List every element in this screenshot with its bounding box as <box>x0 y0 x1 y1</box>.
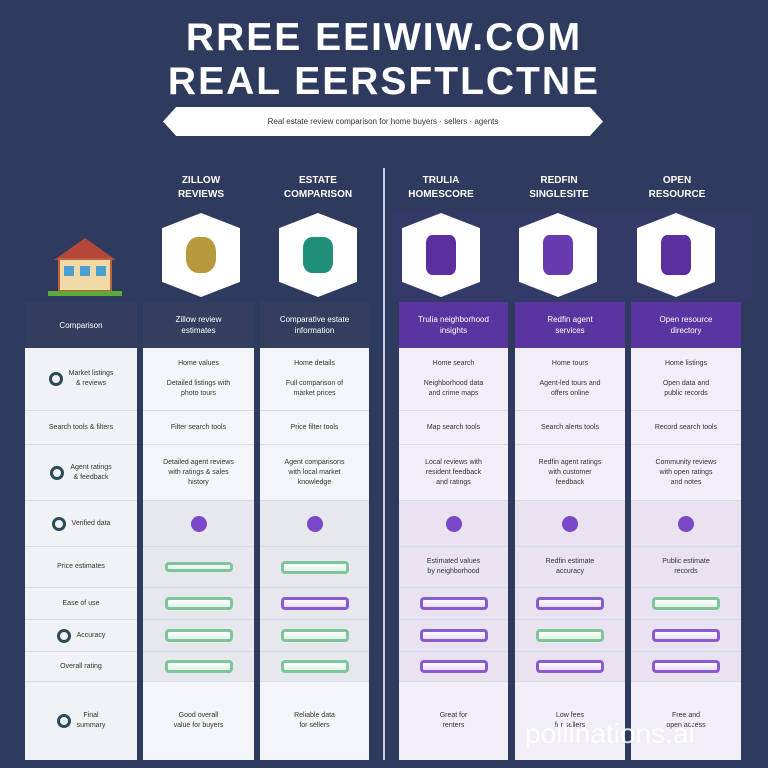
panel: column 5: Open resource <box>660 315 712 324</box>
panel: column 2: for sellers <box>299 722 330 729</box>
panel: column 2: Home details <box>294 360 335 367</box>
panel: label column: Ease of use <box>63 600 99 606</box>
subtitle banner <box>163 107 603 136</box>
panel: column 3: Map search tools <box>427 424 480 430</box>
panel: column 2: Reliable data <box>294 712 335 719</box>
panel: column 1: with ratings & sales <box>168 468 229 476</box>
panel: column 2: market prices <box>293 390 336 397</box>
panel: column 4: with customer <box>548 468 592 476</box>
panel: label column <box>25 320 137 760</box>
panel: column 5: Free and <box>672 712 700 719</box>
panel: column 2: knowledge <box>298 478 331 486</box>
text: REDFIN <box>540 175 578 186</box>
text: OPEN <box>663 175 691 186</box>
panel: label column: Price estimates <box>57 563 105 570</box>
purple tint area <box>392 210 752 302</box>
panel: label column: Verified data <box>72 520 110 526</box>
panel: column 1: value for buyers <box>174 722 223 729</box>
panel: column 5: Community reviews <box>655 458 717 466</box>
panel: column 1 <box>143 315 254 760</box>
panel: column 4: for sellers <box>555 722 585 729</box>
panel: column 5: public records <box>664 390 708 397</box>
panel: column 1: Detailed agent reviews <box>163 458 234 466</box>
panel: column 4: Redfin agent ratings <box>539 458 601 466</box>
title line 1: RREE EEIWIW.COM <box>186 16 582 59</box>
icon: house <box>48 238 122 296</box>
text: RESOURCE <box>649 189 705 200</box>
panel: column 1: Home values <box>178 360 219 367</box>
panel: column 3: Estimated values <box>427 558 480 565</box>
panel: label column: Agent ratings <box>70 464 112 470</box>
panel: column 4 <box>515 302 625 760</box>
divider <box>383 168 385 760</box>
panel: label column: summary <box>77 722 105 729</box>
panel: column 3: and ratings <box>436 478 471 486</box>
panel: column 3: Local reviews with <box>425 458 482 466</box>
panel: column 2: information <box>295 326 334 335</box>
panel: column 1: estimates <box>181 326 216 335</box>
panel: column 5: Record search tools <box>655 424 717 430</box>
panel: column 2: Agent comparisons <box>285 458 344 466</box>
panel: column 2: Full comparison of <box>286 380 343 387</box>
panel: column 3: by neighborhood <box>427 568 480 575</box>
panel: label column: Comparison <box>59 320 103 330</box>
panel: column 4: Agent-led tours and <box>539 380 601 387</box>
panel: column 3: resident feedback <box>426 468 481 476</box>
panel: column 1: Good overall <box>179 712 218 719</box>
panel: column 4: accuracy <box>556 568 584 575</box>
icons: hexagons <box>162 213 240 297</box>
watermark: pollinations.ai <box>525 718 695 749</box>
subtitle banner: Real estate review comparison for home buyers · sellers · agents <box>268 117 498 126</box>
panel: column 4: Search alerts tools <box>541 424 599 430</box>
column headings <box>178 175 224 200</box>
panel: column 3: Great for <box>440 712 467 719</box>
panel: label column: Accuracy <box>77 632 105 638</box>
panel: column 5: directory <box>671 326 701 335</box>
panel: column 2: with local market <box>288 468 341 476</box>
panel: column 1: Detailed listings with <box>167 380 230 387</box>
panel: column 4: Redfin agent <box>547 315 593 324</box>
title line 2: REAL EERSFTLCTNE <box>168 60 600 103</box>
panel: column 3: Trulia neighborhood <box>418 315 489 324</box>
panel: column 4: offers online <box>551 390 589 397</box>
panel: column 1: photo tours <box>181 390 216 397</box>
panel: label column: Search tools & filters <box>49 424 113 430</box>
panel: column 4: feedback <box>556 478 584 486</box>
panel: label column: & reviews <box>76 380 106 387</box>
panel: label column: Market listings <box>69 370 113 377</box>
panel: label column: Overall rating <box>60 662 102 670</box>
panel: column 5: with open ratings <box>660 468 712 476</box>
panel: column 4: Home tours <box>552 360 588 367</box>
panel: column 3 <box>399 302 508 760</box>
panel: label column: Final <box>83 712 99 719</box>
panel: column 3: and crime maps <box>429 390 478 397</box>
text: ESTATE <box>299 175 337 186</box>
panel: column 5: Open data and <box>663 380 709 387</box>
panel: label column: & feedback <box>73 474 109 480</box>
panel: column 4: Low fees <box>556 712 584 719</box>
panel: column 4: services <box>555 326 585 335</box>
panel: column 5: Public estimate <box>662 558 710 565</box>
panel: column 1: Filter search tools <box>171 424 226 430</box>
panel: column 2 <box>260 315 369 760</box>
panel: column 3: renters <box>443 722 464 729</box>
panel: column 3: insights <box>440 326 467 335</box>
text: HOMESCORE <box>408 189 474 200</box>
panel: column 1: history <box>188 478 209 486</box>
column headings: REVIEWS <box>178 189 224 200</box>
panel: column 5: and notes <box>671 478 701 486</box>
panel: column 5: records <box>674 568 698 575</box>
column headings: ZILLOW <box>182 175 220 186</box>
panel: column 2: Price filter tools <box>291 424 338 430</box>
panel: column 1: Zillow review <box>176 315 221 324</box>
panel: column 3: Home search <box>433 360 474 367</box>
panel: column 3: Neighborhood data <box>424 380 483 387</box>
panel: column 5: open access <box>666 722 706 729</box>
text: TRULIA <box>423 175 459 186</box>
text: COMPARISON <box>284 189 352 200</box>
text: SINGLESITE <box>529 189 589 200</box>
panel: column 5: Home listings <box>665 360 707 367</box>
panel: column 4: Redfin estimate <box>546 558 594 565</box>
panel: column 5 <box>631 302 741 760</box>
panel: column 2: Comparative estate <box>280 315 349 324</box>
